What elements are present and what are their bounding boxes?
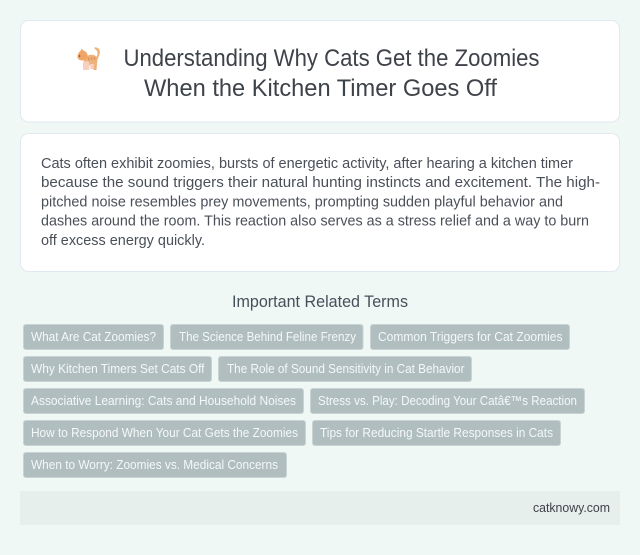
tag: reducing startle: Tips for Reducing Startle Responses in Cats [320, 426, 553, 440]
tag: when to worry: When to Worry: Zoomies vs. Medical Concerns [31, 458, 278, 472]
tag: sound sensitivity [218, 356, 472, 382]
tag: science behind feline frenzy [170, 324, 363, 350]
tag: common triggers: Common Triggers for Cat Zoomies [378, 330, 562, 344]
tag: associative learning: Associative Learning: Cats and Household Noises [31, 394, 296, 408]
tag: kitchen timers [24, 356, 212, 382]
text block: description: Cats often exhibit zoomies, bursts of energetic activity, after hearing a kitchen timer [41, 155, 573, 172]
tag: what are cat zoomies [24, 324, 164, 350]
title [124, 45, 540, 102]
tag: reducing startle [312, 420, 560, 446]
tag: kitchen timers: Why Kitchen Timers Set Cats Off [31, 362, 205, 376]
footer [20, 491, 620, 525]
tag: science behind feline frenzy: The Science Behind Feline Frenzy [179, 330, 357, 344]
tag: stress vs play [310, 388, 584, 414]
text block: description [41, 155, 600, 249]
text block: description: dashes around the room. This reaction also serves as a stress relief and a way to burn [41, 212, 589, 230]
title: Understanding Why Cats Get the Zoomies [124, 45, 540, 72]
tag: how to respond [24, 420, 306, 446]
tag list: related terms [24, 324, 584, 478]
tag: stress vs play: Stress vs. Play: Decoding Your Catâ€™s Reaction [318, 394, 577, 408]
text block: description: off excess energy quickly. [41, 232, 205, 249]
tag: common triggers [370, 324, 570, 350]
tag: sound sensitivity: The Role of Sound Sensitivity in Cat Behavior [227, 362, 464, 376]
tag: what are cat zoomies: What Are Cat Zoomies? [31, 330, 156, 344]
title: When the Kitchen Timer Goes Off [144, 75, 497, 102]
footer: catknowy.com [533, 500, 610, 515]
icon: orange cat [78, 47, 100, 70]
panel: title card [20, 20, 620, 122]
panel: description [20, 134, 620, 272]
tag: when to worry [24, 452, 286, 478]
tag: how to respond: How to Respond When Your Cat Gets the Zoomies [31, 426, 298, 440]
tag: associative learning [24, 388, 304, 414]
text block: description: because the sound triggers their natural hunting instincts and excitement. The high- [41, 174, 600, 191]
text block: description: pitched noise resembles prey movements, prompting sudden playful behavior and [41, 194, 563, 210]
heading: related terms: Important Related Terms [232, 293, 408, 311]
